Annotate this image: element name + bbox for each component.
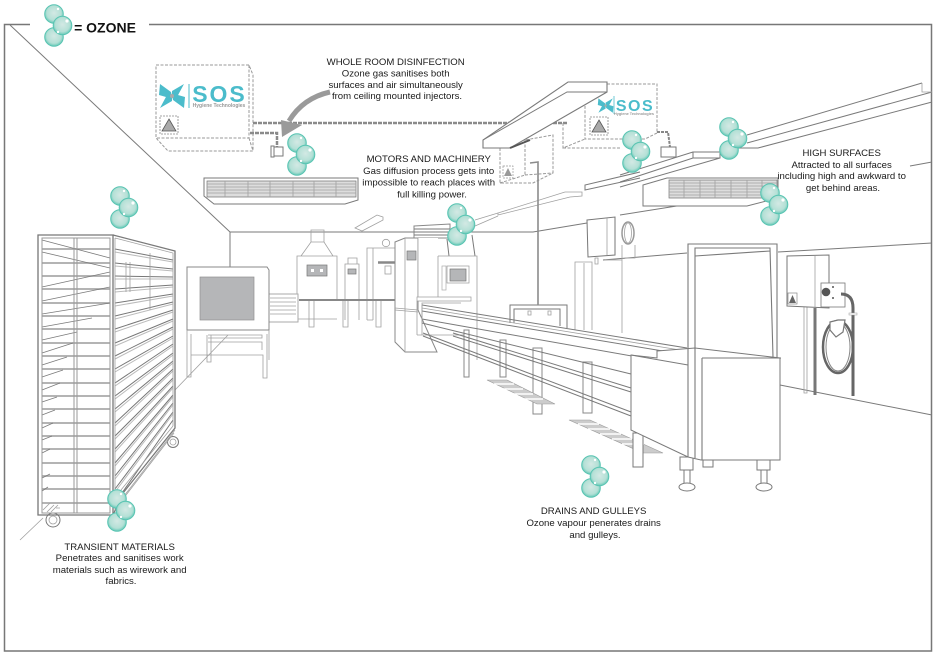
legend: ozone key: [45, 5, 136, 46]
arrow to injector: [281, 92, 330, 137]
wall control box centre: [575, 217, 635, 333]
motors and machinery text: impossible to reach places with: [362, 178, 495, 188]
transient materials text: TRANSIENT MATERIALS: [64, 542, 175, 553]
drains and gulleys text: and gulleys.: [569, 530, 621, 541]
feet: [633, 433, 772, 491]
ceiling unit left: [204, 178, 358, 204]
SOS injector unit right: Hygiene Technologies: [614, 112, 654, 116]
high surfaces text: including high and awkward to: [777, 171, 906, 182]
SOS injector unit right: SOS: [616, 98, 654, 115]
machine top louvres: [414, 224, 450, 238]
small ceiling light: [355, 215, 383, 231]
ozone bubbles: high rail: [720, 118, 747, 159]
transient materials text: fabrics.: [106, 576, 136, 587]
ozone bubbles: whole room: [288, 134, 315, 175]
ceiling light fitting: [483, 82, 607, 148]
motors and machinery text: full killing power.: [397, 190, 467, 200]
ozone bubbles: ceiling right injector: [623, 131, 650, 172]
wall control box right with hose: [787, 255, 857, 396]
whole room disinfection text: surfaces and air simultaneously: [328, 80, 463, 91]
louvre panel behind oven: [268, 294, 298, 322]
ozone bubbles: rack top: [111, 187, 138, 228]
supply pipe: [530, 162, 538, 305]
side table: [299, 300, 395, 327]
room perspective lines: [10, 25, 932, 540]
high surfaces text: get behind areas.: [806, 183, 880, 194]
rack side frame: [113, 235, 175, 515]
conveyor: [422, 162, 687, 416]
whole room disinfection text: WHOLE ROOM DISINFECTION: [327, 57, 465, 68]
rack front frame: [38, 235, 113, 515]
inner perspective lines: [42, 240, 110, 491]
legend: ozone key: = OZONE: [74, 20, 136, 36]
gas pipes: [250, 123, 568, 157]
gate frame: [688, 244, 777, 460]
ozone bubbles: motors: [448, 204, 475, 245]
high surfaces text: HIGH SURFACES: [802, 148, 881, 159]
front shelves: [42, 249, 110, 503]
motors and machinery text: MOTORS AND MACHINERY: [367, 154, 491, 165]
conveyor end unit: [631, 244, 781, 491]
tall cabinet: [367, 239, 395, 320]
conveyor frame arch: [510, 305, 567, 328]
cabinet: [345, 258, 359, 320]
control machine: [418, 235, 477, 360]
side shelves: [115, 249, 173, 503]
floor drains: [487, 380, 663, 453]
tall machine: [395, 238, 437, 352]
oven unit: [187, 267, 269, 378]
ceiling rails: [475, 83, 932, 226]
work table: [417, 297, 471, 335]
high surfaces text: Attracted to all surfaces: [792, 160, 892, 171]
drains and gulleys text: Ozone vapour penerates drains: [526, 518, 661, 529]
conveyor legs: [464, 330, 592, 414]
SOS unit centre small: [500, 135, 553, 183]
motors and machinery text: Gas diffusion process gets into: [363, 166, 494, 177]
SOS injector unit left: SOS: [192, 81, 247, 107]
back wall machinery: [268, 224, 477, 360]
conveyor rails: [422, 305, 687, 374]
whole room disinfection text: from ceiling mounted injectors.: [332, 91, 462, 102]
SOS injector unit left: [156, 65, 253, 151]
ozone bubbles: rack bottom: [108, 490, 135, 531]
whole room disinfection text: Ozone gas sanitises both: [342, 68, 450, 80]
transient materials text: Penetrates and sanitises work: [56, 553, 184, 564]
ozone bubbles: high surfaces: [761, 184, 788, 225]
drains and gulleys text: DRAINS AND GULLEYS: [541, 506, 646, 517]
wire rack trolley: [38, 235, 178, 527]
ozone bubbles: drains: [582, 456, 609, 497]
SOS injector unit right: [563, 84, 676, 157]
ceiling unit right: [643, 178, 778, 206]
extraction hood: [297, 230, 337, 319]
casters: [46, 436, 178, 527]
transient materials text: materials such as wirework and: [53, 565, 187, 576]
SOS injector unit left: Hygiene Technologies: [193, 103, 246, 109]
